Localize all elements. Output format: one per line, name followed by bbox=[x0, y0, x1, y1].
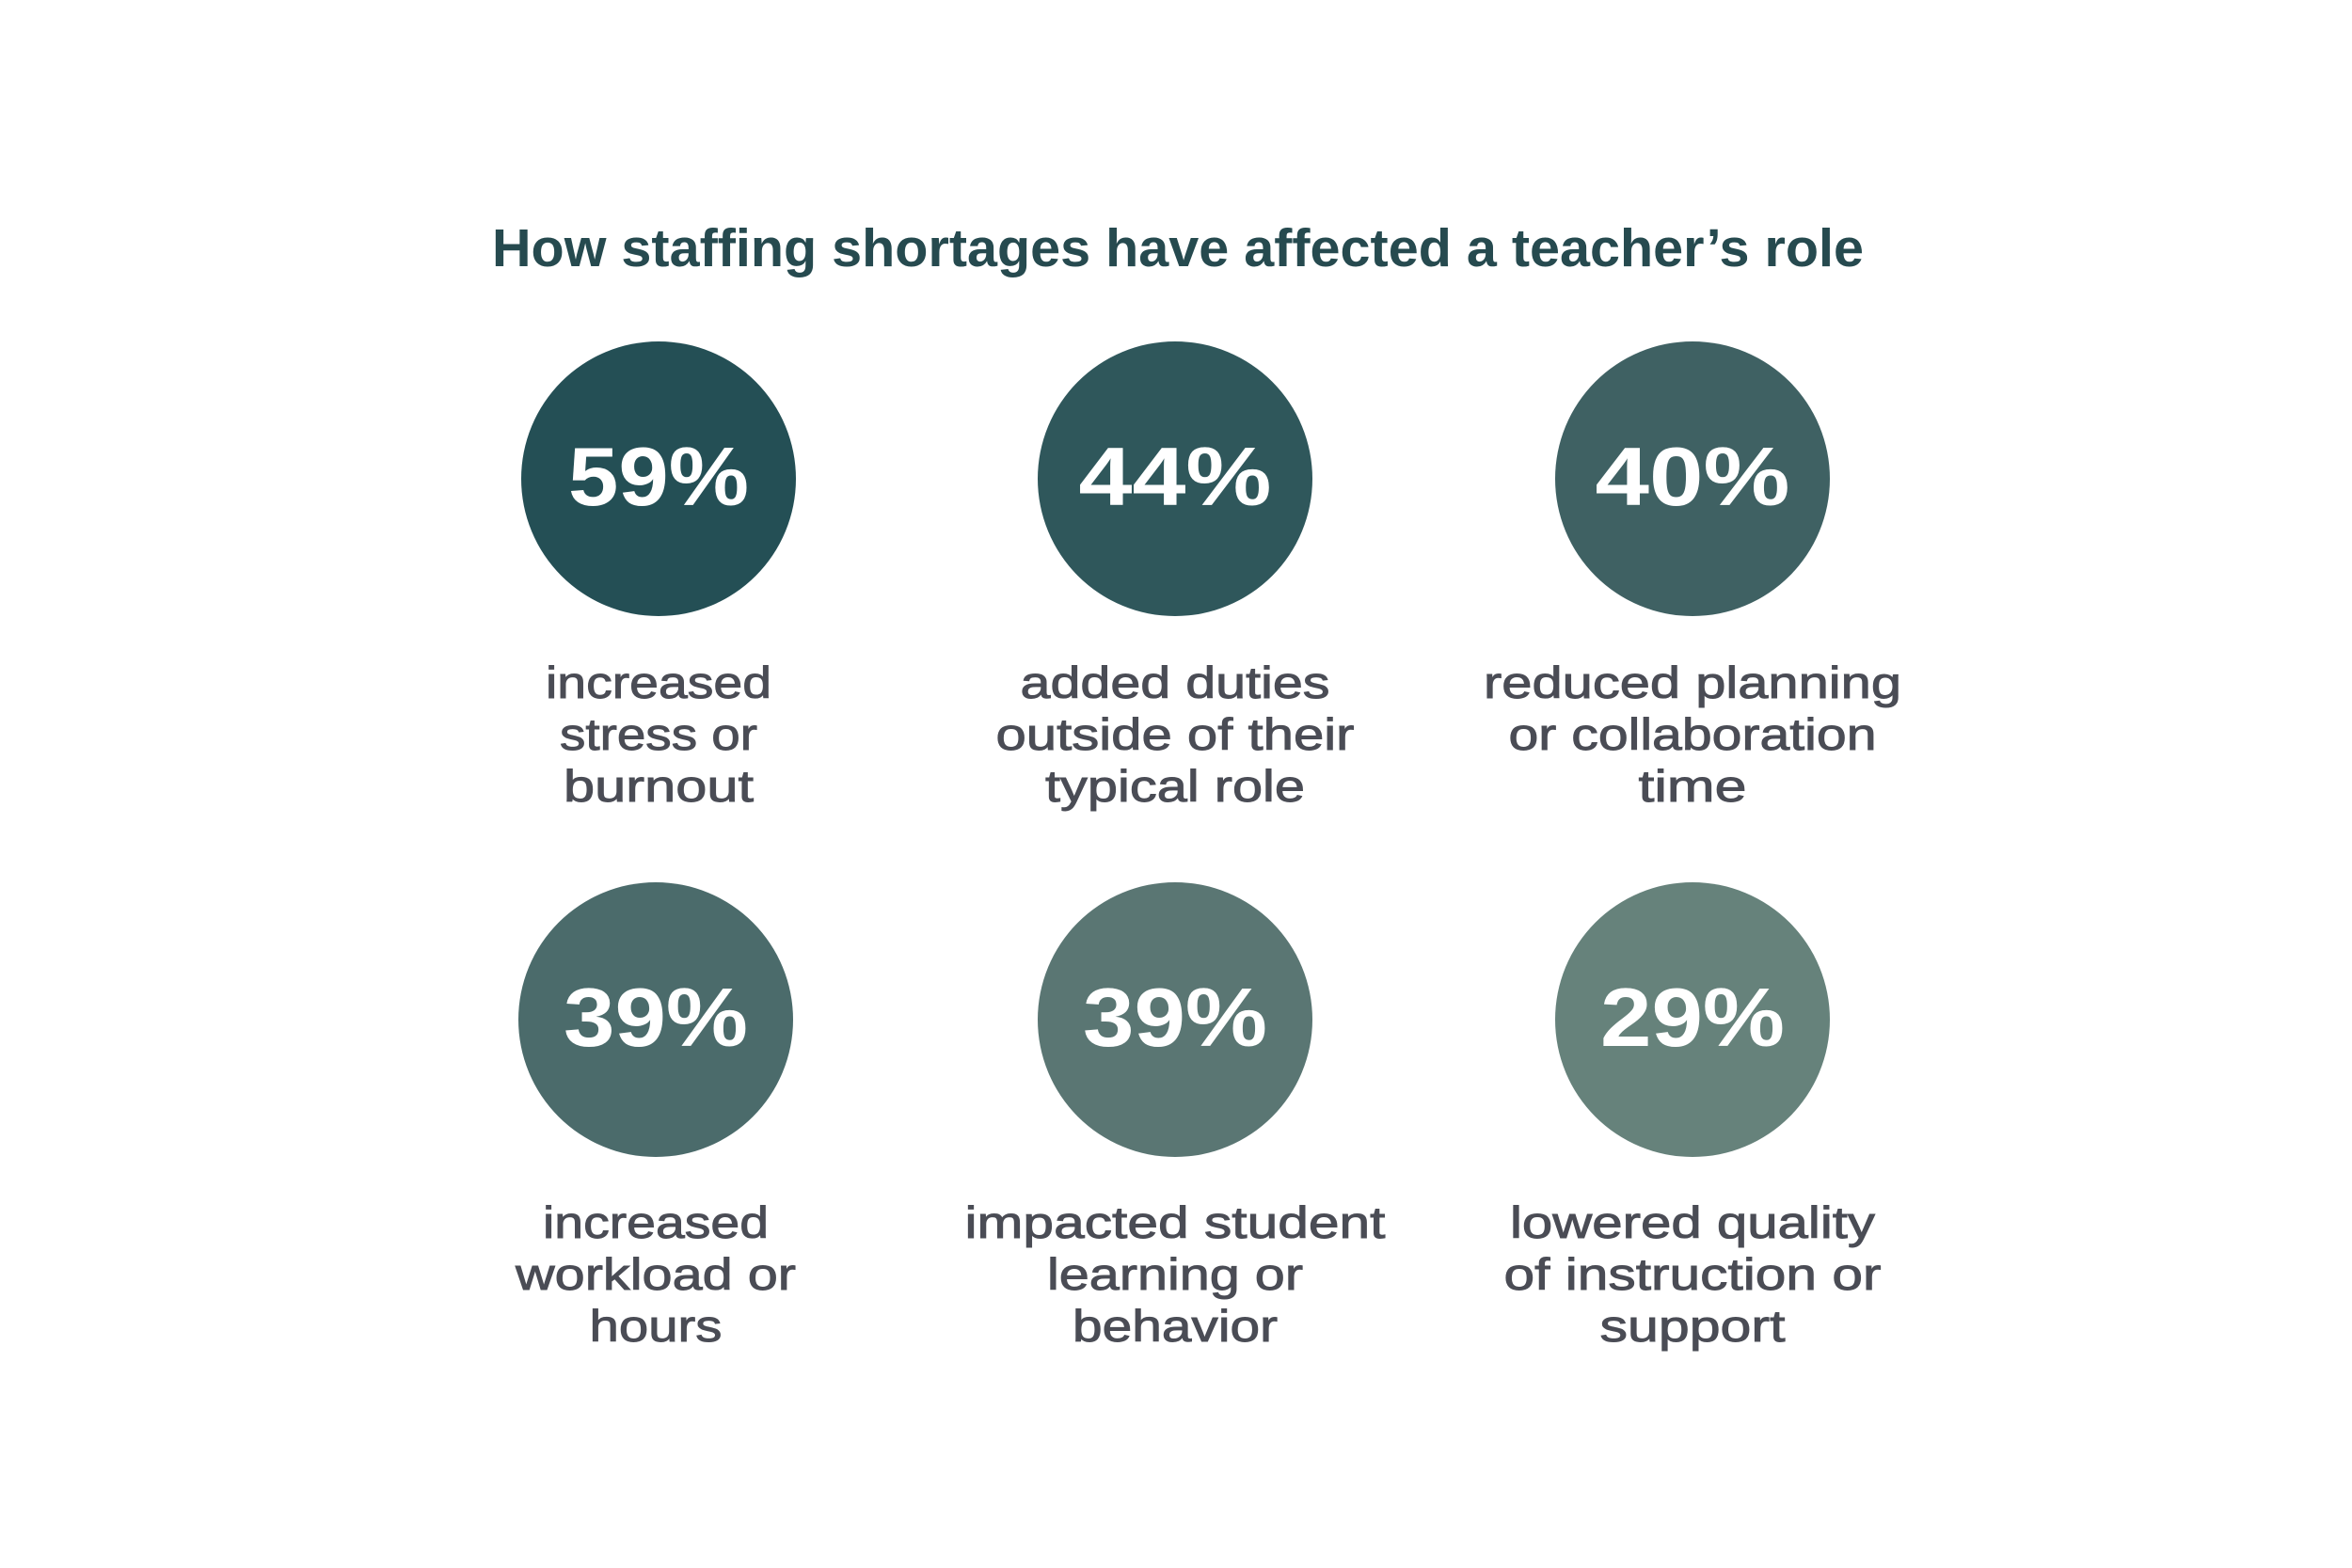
stat: 39% impacted student learning: 39% bbox=[1083, 971, 1267, 1064]
stat: 44% added duties: outside of their bbox=[995, 709, 1355, 759]
stat: 29% lowered quality: lowered quality bbox=[1510, 1197, 1876, 1247]
stat: 39% increased workload: hours bbox=[589, 1301, 723, 1351]
stat: 29% lowered quality: 29% bbox=[1600, 971, 1785, 1064]
title: How staffing shortages have affected a teacher’s role bbox=[492, 218, 1864, 278]
stat: 40% reduced planning bbox=[1484, 341, 1901, 811]
stat: 39% increased workload: increased bbox=[543, 1197, 769, 1247]
stat: 40% reduced planning: time bbox=[1639, 761, 1746, 811]
stat: 39% impacted student learning: learning or bbox=[1047, 1249, 1303, 1299]
stat: 44% added duties: added duties bbox=[1020, 657, 1330, 707]
stat: 59% increased stress: burnout bbox=[564, 761, 754, 811]
stat: 29% lowered quality: support bbox=[1599, 1301, 1786, 1351]
stat: 39% increased workload: workload or bbox=[515, 1249, 796, 1299]
stat: 59% increased stress bbox=[521, 341, 796, 811]
stat: 44% added duties bbox=[995, 341, 1355, 811]
stat: 39% impacted student learning: behavior bbox=[1073, 1301, 1278, 1351]
stat: 40% reduced planning: 40% bbox=[1596, 430, 1789, 523]
stat: 44% added duties: typical role bbox=[1045, 761, 1305, 811]
stat: 29% lowered quality: of instruction or bbox=[1503, 1249, 1882, 1299]
stat: 39% impacted student learning bbox=[965, 882, 1385, 1351]
stat: 29% lowered quality bbox=[1503, 882, 1882, 1351]
stat: 59% increased stress: 59% bbox=[568, 430, 749, 523]
stat: 40% reduced planning: or collaboration bbox=[1509, 709, 1876, 759]
stat: 39% increased workload: 39% bbox=[564, 971, 748, 1064]
stat: 39% increased workload bbox=[515, 882, 796, 1351]
stat: 39% impacted student learning: impacted student bbox=[965, 1197, 1385, 1247]
stat: 40% reduced planning: reduced planning bbox=[1484, 657, 1901, 707]
stat: 59% increased stress: stress or bbox=[560, 709, 757, 759]
stat: 44% added duties: 44% bbox=[1078, 430, 1272, 523]
stat: 59% increased stress: increased bbox=[546, 657, 771, 707]
